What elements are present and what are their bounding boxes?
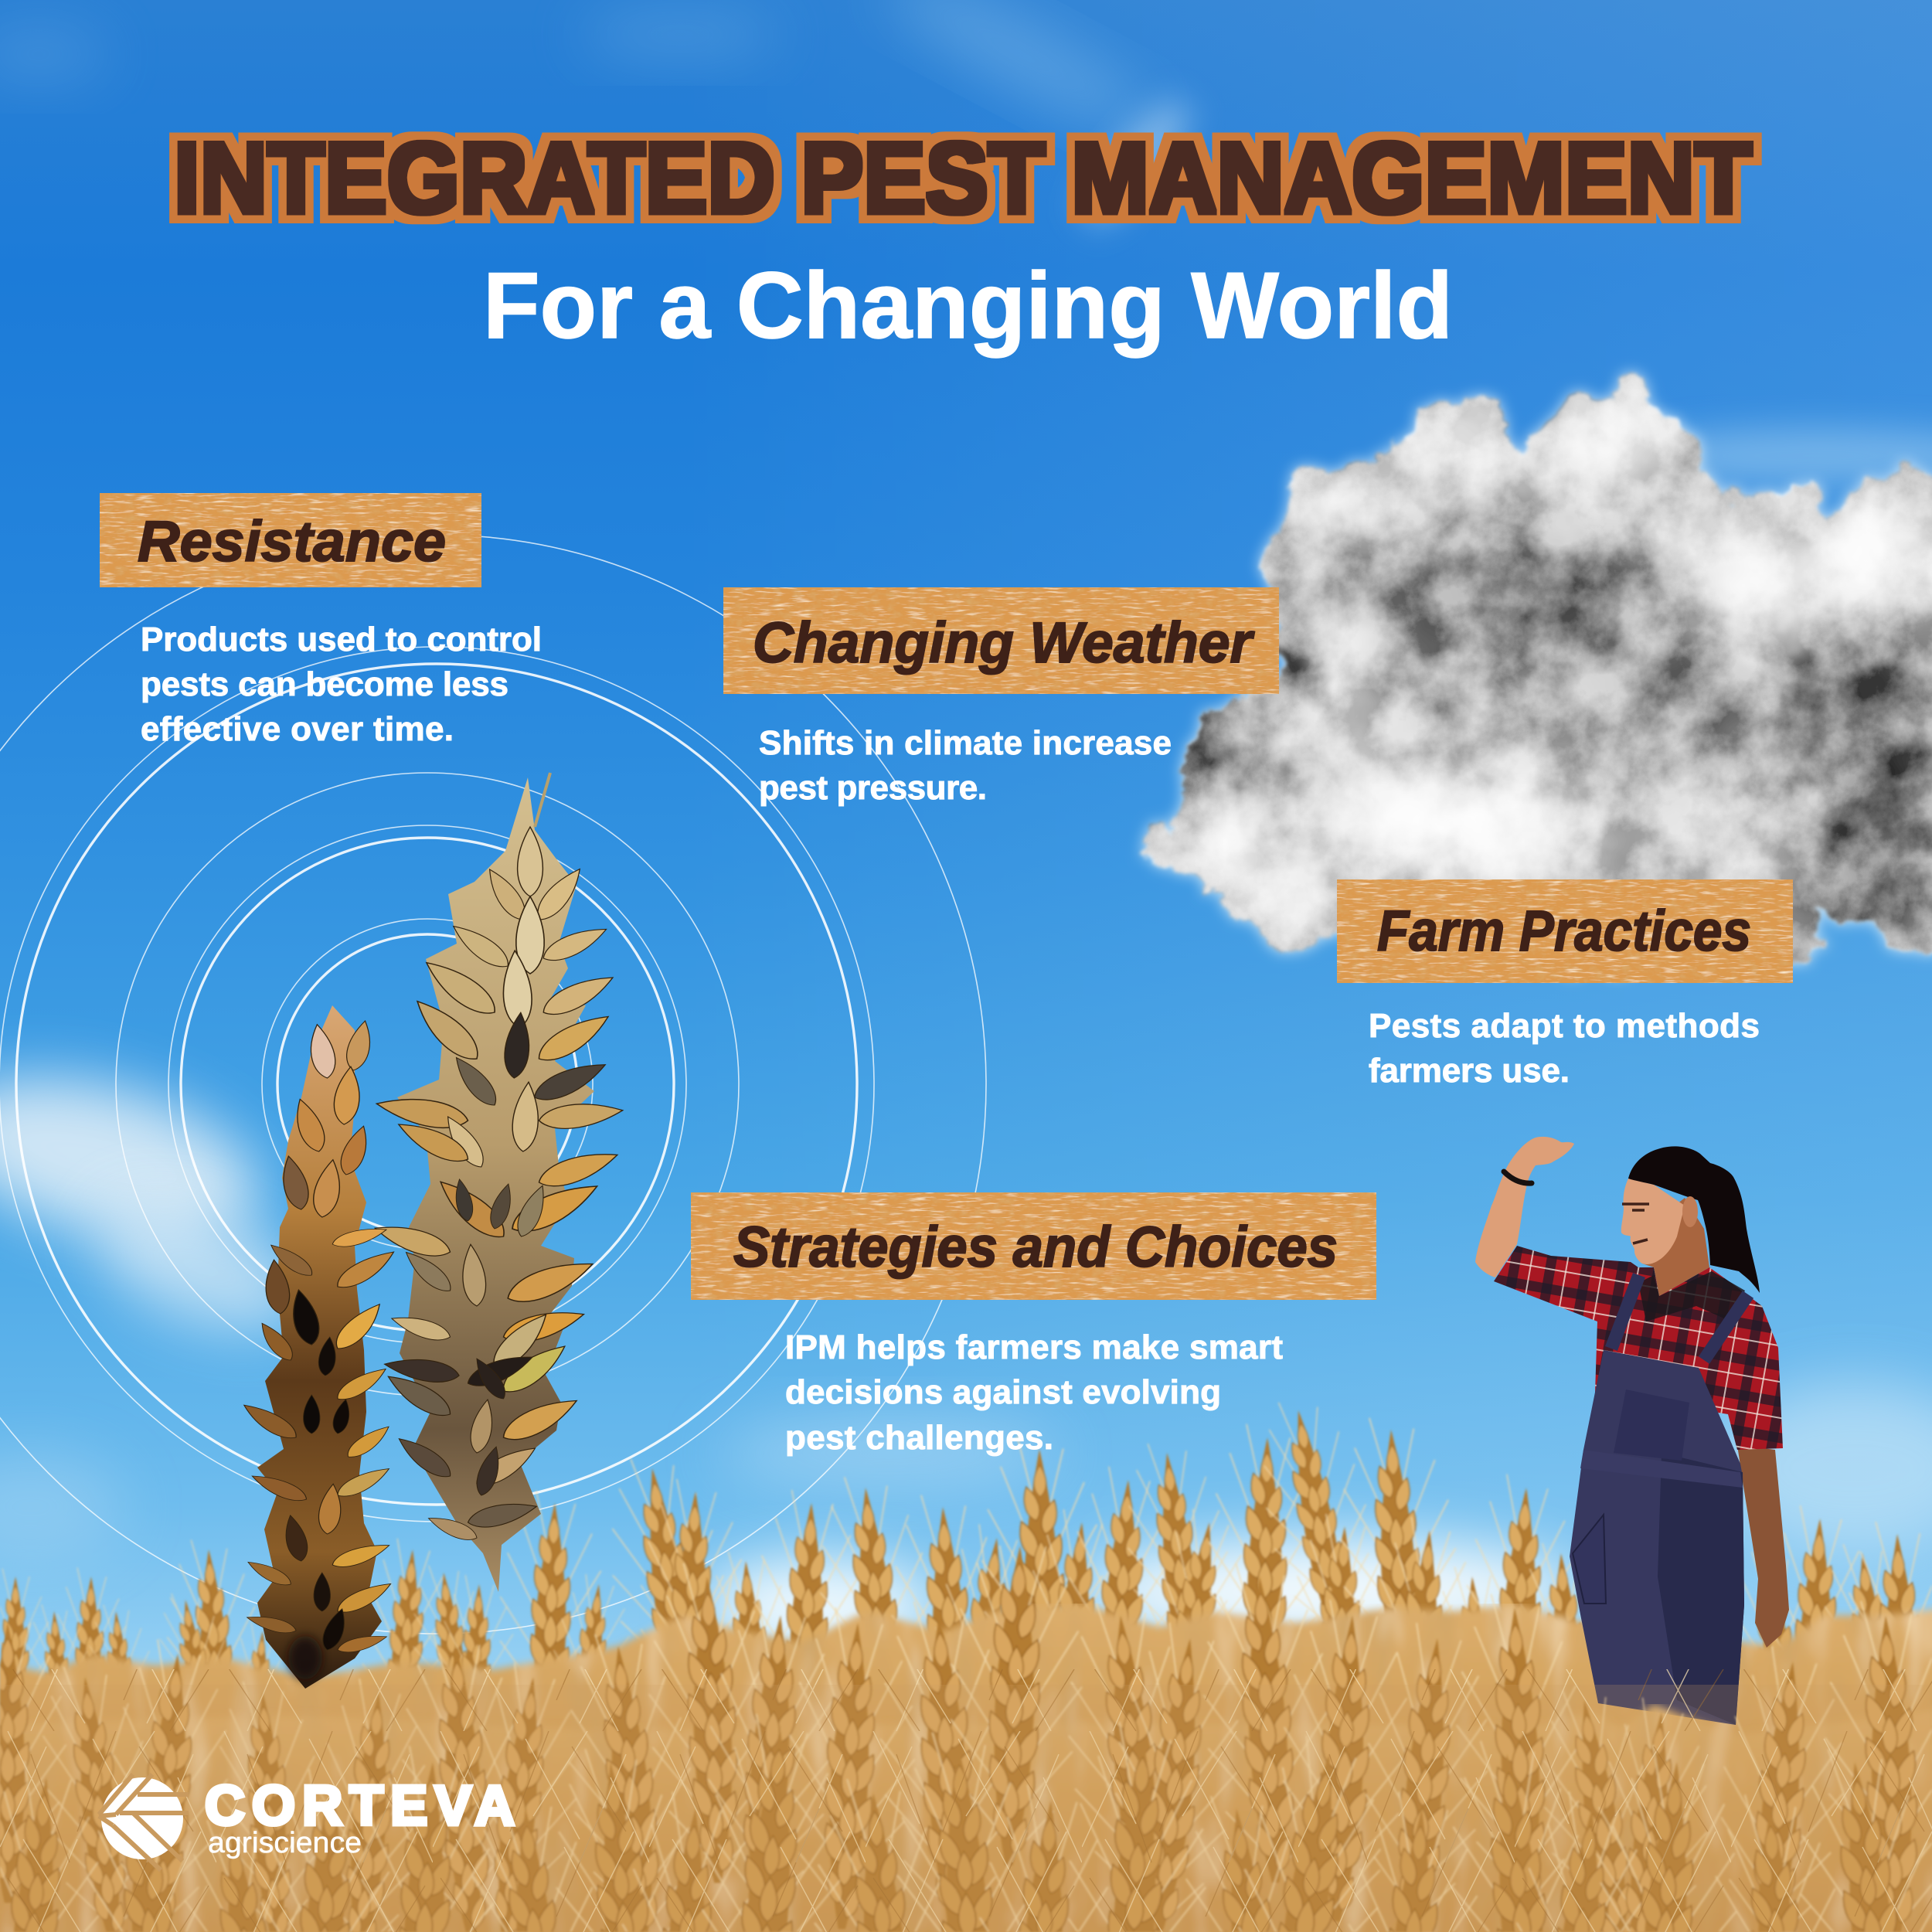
text: Changing Weather description: Shifts in climate increase — [759, 724, 1172, 762]
text: Farm Practices description: Pests adapt to methods — [1369, 1007, 1760, 1045]
text: Resistance description: effective over time. — [141, 710, 454, 748]
neck and face — [1642, 1198, 1709, 1296]
text: Resistance description: pests can become less — [141, 665, 509, 703]
label panel: Strategies and Choices — [691, 1192, 1376, 1300]
text: Changing Weather description: pest pressure. — [759, 769, 987, 807]
logo: Corteva agriscience — [99, 1774, 515, 1870]
overalls — [1570, 1350, 1744, 1725]
label panel: Changing Weather — [723, 587, 1279, 694]
label panel: Farm Practices — [1337, 879, 1793, 983]
text: Farm Practices description: farmers use. — [1369, 1052, 1570, 1090]
label panel: Farm Practices: Farm Practices — [1377, 899, 1751, 963]
plaid shirt — [1494, 1246, 1783, 1450]
text: Strategies and Choices description: IPM helps farmers make smart — [785, 1328, 1283, 1366]
label panel: Changing Weather: Changing Weather — [753, 611, 1255, 675]
farmer woman — [1475, 1137, 1789, 1725]
brand wordmark: CORTEVA — [205, 1775, 515, 1837]
raised arm and hand — [1475, 1137, 1574, 1277]
ear — [1682, 1196, 1698, 1227]
text: Strategies and Choices description: pest challenges. — [785, 1419, 1053, 1457]
overall straps — [1611, 1275, 1748, 1360]
face details — [1622, 1204, 1649, 1243]
brand sub-wordmark: agriscience — [208, 1827, 362, 1859]
diseased wheat ear: left — [237, 1005, 401, 1689]
text: Strategies and Choices description: decisions against evolving — [785, 1373, 1221, 1411]
text: Resistance description: Products used to control — [141, 621, 542, 658]
icon: Corteva emblem — [99, 1774, 189, 1870]
diseased wheat ear: right — [371, 773, 624, 1592]
wheat field front row — [0, 1546, 1932, 1932]
subtitle: For a Changing World — [483, 253, 1453, 358]
label panel: Resistance: Resistance — [138, 509, 446, 573]
title: INTEGRATED PEST MANAGEMENT — [174, 121, 1752, 234]
right arm — [1737, 1445, 1789, 1648]
hair — [1628, 1146, 1760, 1293]
concentric rings — [0, 535, 986, 1634]
label panel: Resistance — [100, 493, 481, 587]
wheat field back row — [0, 1391, 1932, 1932]
label panel: Strategies and Choices: Strategies and Choices — [733, 1215, 1338, 1279]
bracelet — [1504, 1172, 1532, 1183]
storm cloud — [1113, 355, 1932, 989]
